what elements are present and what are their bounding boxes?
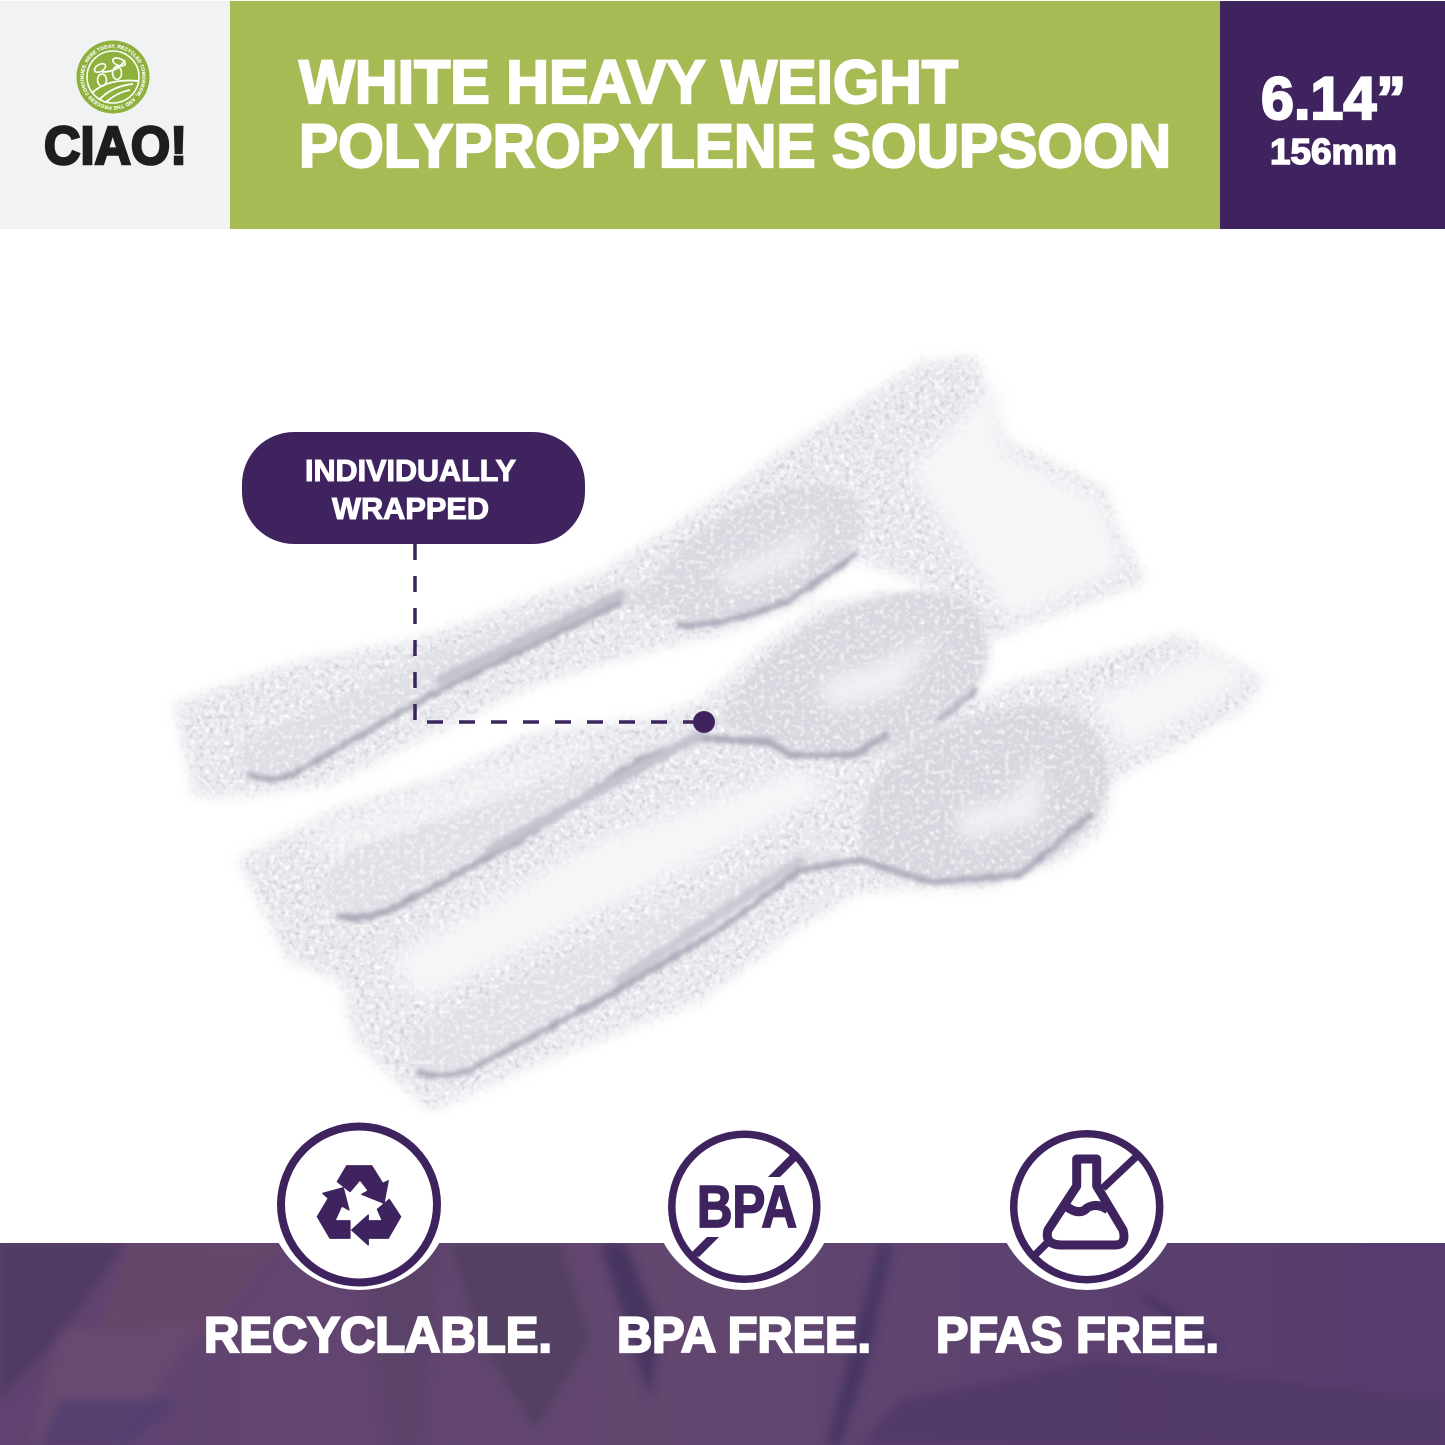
callout: individually wrapped bbox=[242, 432, 715, 733]
size panel bbox=[1220, 1, 1445, 229]
icon: flask bbox=[1047, 1159, 1124, 1245]
wrapper: bottom spoon bbox=[345, 635, 1265, 1110]
wrapper light zones bbox=[300, 380, 1250, 1000]
callout text: WRAPPED bbox=[332, 491, 489, 526]
header banner bbox=[0, 1, 1445, 229]
title text bbox=[299, 48, 1171, 180]
wrapper: top spoon bbox=[176, 358, 1145, 795]
callout leader line bbox=[415, 544, 700, 722]
badge ring bbox=[281, 1126, 437, 1282]
wrapper: middle spoon bbox=[240, 593, 987, 985]
logo panel bbox=[0, 1, 230, 229]
logo badge: AND THE PROCESS CONTINUES. HERE TODAY, RECYCLED TOMORROW, bbox=[80, 44, 146, 110]
callout text bbox=[305, 453, 516, 526]
callout text: INDIVIDUALLY bbox=[305, 453, 516, 488]
title panel bbox=[230, 1, 1220, 229]
feature labels bbox=[204, 1307, 1219, 1363]
badge halo bbox=[664, 1243, 824, 1290]
size text: 6.14” bbox=[1261, 65, 1406, 132]
spoon bodies bbox=[239, 485, 1107, 1075]
badge ring bbox=[672, 1134, 817, 1279]
badge halo bbox=[1006, 1243, 1168, 1290]
badge: pfas free bbox=[1006, 1130, 1168, 1290]
prohibition slash bbox=[1033, 1155, 1138, 1257]
badge: bpa free bbox=[664, 1130, 824, 1290]
product photo: wrapped spoons bbox=[176, 358, 1265, 1110]
feature labels: BPA FREE. bbox=[617, 1307, 871, 1363]
prohibition slash bbox=[690, 1155, 797, 1257]
plastic wrappers bbox=[176, 358, 1265, 1110]
badge: recyclable bbox=[277, 1122, 441, 1290]
spoon: middle bbox=[720, 592, 986, 755]
size text bbox=[1261, 65, 1406, 172]
size text: 156mm bbox=[1270, 131, 1397, 172]
spoon highlights bbox=[720, 520, 1040, 840]
footer band bbox=[0, 1243, 1445, 1445]
title text: WHITE HEAVY WEIGHT bbox=[299, 48, 958, 116]
icon: bpa text: BPA bbox=[697, 1174, 797, 1240]
spoon: top bbox=[620, 485, 861, 623]
badge ring bbox=[1014, 1134, 1160, 1280]
title text: POLYPROPYLENE SOUPSOON bbox=[299, 112, 1171, 180]
feature labels: PFAS FREE. bbox=[936, 1307, 1219, 1363]
leaf shadows bbox=[0, 1243, 1445, 1445]
icon: recycling arrows bbox=[317, 1166, 401, 1245]
callout pill bbox=[242, 432, 585, 544]
callout dot bbox=[693, 711, 715, 733]
spoon: bottom bbox=[860, 706, 1107, 885]
badge halo bbox=[278, 1243, 440, 1290]
spoon edge shadows bbox=[250, 555, 1090, 1076]
logo wordmark: CIAO! bbox=[44, 116, 187, 176]
feature labels: RECYCLABLE. bbox=[204, 1307, 552, 1363]
